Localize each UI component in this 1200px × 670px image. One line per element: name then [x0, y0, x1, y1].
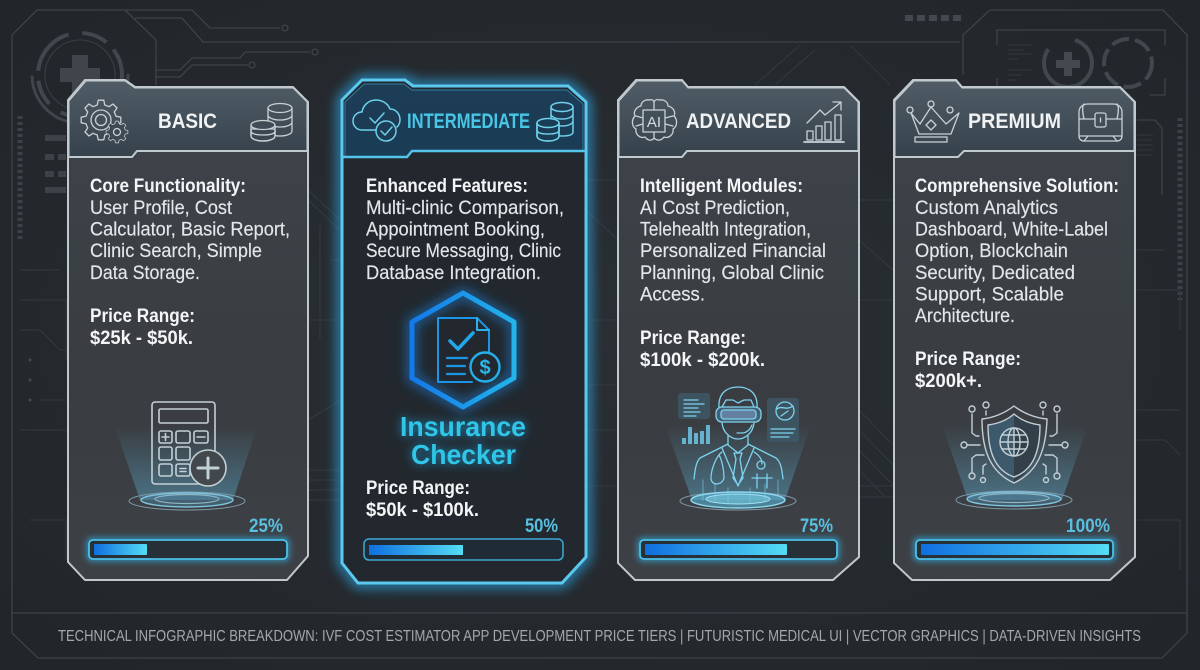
- intermediate header band: [345, 84, 583, 157]
- icon: coins blue: [537, 102, 573, 141]
- icon: AI brain: AI: [647, 114, 661, 131]
- label: insurance checker: Checker: [411, 439, 516, 470]
- text: advanced features: Personalized Financial: [640, 240, 826, 262]
- text: basic features: Core Functionality:: [90, 175, 246, 197]
- text: advanced price range: Price Range:: [640, 327, 746, 349]
- text: basic features: Clinic Search, Simple: [90, 240, 262, 262]
- dollar sign: $: [479, 357, 491, 379]
- text: premium features: Security, Dedicated: [915, 262, 1075, 284]
- heading: advanced: ADVANCED: [686, 109, 791, 133]
- icon: hologram security shield: [942, 402, 1088, 509]
- advanced header underline: [618, 151, 859, 157]
- text: advanced features: Intelligent Modules:: [640, 175, 803, 197]
- text: intermediate features: Multi-clinic Comparison,: [366, 197, 564, 219]
- text: premium price range: Price Range:: [915, 348, 1021, 370]
- text: advanced price range: $100k - $200k.: [640, 349, 765, 371]
- text: premium price range: $200k+.: [915, 370, 982, 392]
- premium header band: [895, 81, 1134, 157]
- premium card frame: [894, 80, 1135, 580]
- text: premium features: Comprehensive Solution:: [915, 175, 1119, 197]
- text: advanced features: Access.: [640, 284, 705, 306]
- text: intermediate price range: [366, 477, 479, 521]
- text: advanced features: Telehealth Integration,: [640, 218, 811, 240]
- icon: hologram calculator: [115, 402, 257, 510]
- advanced card frame: [618, 80, 859, 580]
- panel: basic tier: [68, 80, 308, 580]
- progress bar: 75%: [637, 537, 840, 562]
- text: intermediate features: Secure Messaging, Clinic: [366, 240, 561, 262]
- text: basic features: Data Storage.: [90, 262, 200, 284]
- intermediate card frame: [342, 80, 586, 583]
- text: intermediate features: Appointment Booking,: [366, 218, 545, 240]
- text: basic price range: Price Range:: [90, 305, 195, 327]
- text: premium features: Architecture.: [915, 305, 1015, 327]
- icon: hologram doctor with VR headset: [665, 387, 811, 510]
- text: premium features: Dashboard, White-Label: [915, 218, 1108, 240]
- progress bar: 25%: [86, 537, 290, 562]
- icon: treasure chest: [1079, 104, 1122, 141]
- text: basic price range: $25k - $50k.: [90, 327, 193, 349]
- percent label: 50%: 50%: [525, 516, 558, 537]
- icon: insurance document hexagon: [412, 293, 514, 407]
- icon: gears: [81, 100, 128, 143]
- icon: growth chart: [804, 102, 844, 142]
- premium header underline: [894, 151, 1135, 157]
- text: premium features: Option, Blockchain: [915, 240, 1068, 262]
- text: premium price range: [915, 348, 1021, 392]
- panel: premium tier: [894, 80, 1135, 580]
- heading: premium: PREMIUM: [968, 109, 1061, 133]
- percent label: 100%: 100%: [1066, 516, 1110, 537]
- text: advanced features: AI Cost Prediction,: [640, 197, 790, 219]
- text: intermediate features: [366, 175, 564, 284]
- text: intermediate price range: $50k - $100k.: [366, 499, 479, 521]
- label: insurance checker: Insurance: [400, 411, 526, 442]
- text: intermediate price range: Price Range:: [366, 477, 470, 499]
- progress bar: 50%: [364, 539, 563, 560]
- text: advanced features: [640, 175, 826, 306]
- text: intermediate features: Database Integration.: [366, 262, 541, 284]
- text: basic features: Calculator, Basic Report,: [90, 218, 290, 240]
- basic header band: [69, 81, 307, 157]
- panel: intermediate tier (highlighted): [342, 80, 586, 583]
- intermediate glow: [342, 80, 586, 583]
- icon: cloud check: [353, 100, 400, 141]
- heading: intermediate: INTERMEDIATE: [407, 109, 530, 133]
- icon: coins: [251, 104, 292, 141]
- basic card frame: [68, 80, 308, 580]
- percent label: 75%: 75%: [800, 516, 833, 537]
- text: basic features: User Profile, Cost: [90, 197, 233, 219]
- icon: crown: [907, 101, 959, 142]
- text: basic price range: [90, 305, 195, 349]
- advanced header band: [619, 81, 858, 157]
- basic header underline: [68, 151, 308, 157]
- progress bar: 100%: [913, 537, 1116, 562]
- text: basic features: [90, 175, 290, 284]
- text: advanced price range: [640, 327, 765, 371]
- text: advanced features: Planning, Global Clinic: [640, 262, 824, 284]
- text: premium features: Support, Scalable: [915, 284, 1064, 306]
- heading: basic: BASIC: [158, 109, 217, 133]
- text: intermediate features: Enhanced Features:: [366, 175, 528, 197]
- label: insurance checker: [400, 411, 526, 470]
- icon: AI brain: [632, 100, 677, 140]
- text: premium features: Custom Analytics: [915, 197, 1058, 219]
- percent label: 25%: 25%: [249, 516, 283, 537]
- panel: advanced tier: [618, 80, 859, 580]
- intermediate header underline: [342, 151, 586, 157]
- text: premium features: [915, 175, 1119, 327]
